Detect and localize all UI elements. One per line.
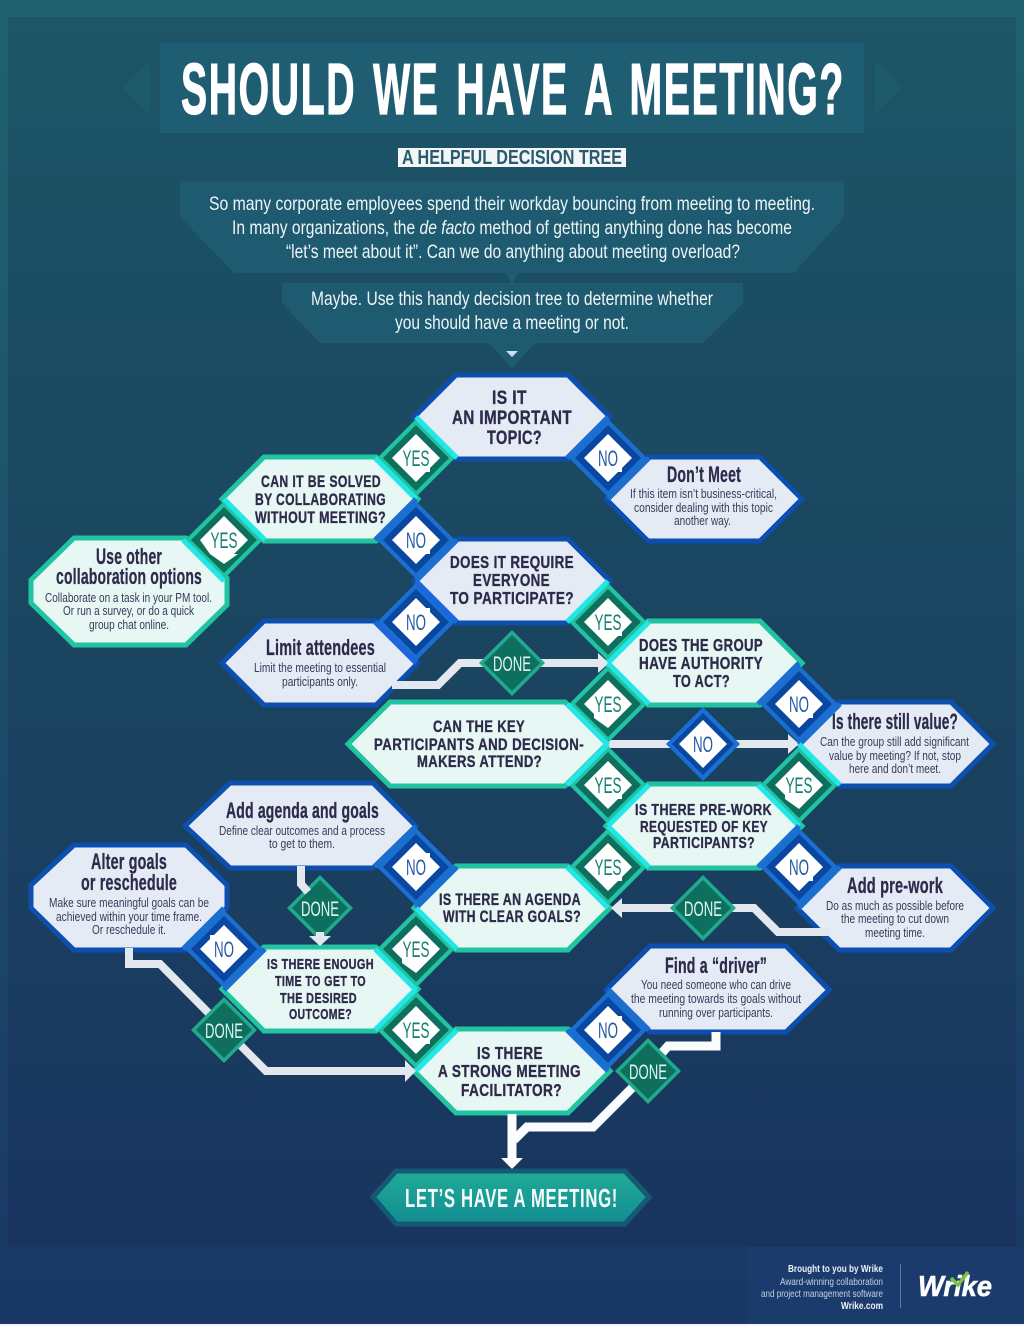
decision: no: NO: [406, 855, 426, 880]
outcome: alter goals or reschedule: [31, 845, 227, 950]
decision: yes: YES: [402, 937, 430, 962]
follow-up panel: [282, 283, 743, 368]
done: limit attendees: DONE: [493, 653, 531, 676]
decision: yes: YES: [594, 692, 622, 717]
outcome: alter goals or reschedule: achieved within your time frame.: [56, 910, 202, 924]
question: everyone participate: [414, 539, 610, 623]
decision: yes: YES: [210, 528, 238, 553]
arrow: facilitator to let's have a meeting: [501, 1114, 523, 1169]
outcome: use other collaboration options: collaboration options: [56, 564, 202, 589]
outcome: use other collaboration options: Use other: [96, 544, 162, 569]
outcome: find a driver: the meeting towards its goals without: [631, 992, 801, 1006]
decision: no: NO: [789, 692, 809, 717]
decision: yes: [567, 663, 649, 745]
follow-up panel: Maybe. Use this handy decision tree to determine whether: [311, 288, 713, 310]
decision: yes: YES: [594, 610, 622, 635]
arrow: alter goals to facilitator: [129, 948, 416, 1082]
arrow: limit attendees to authority: [392, 653, 609, 685]
outcome: add pre-work: Do as much as possible before: [826, 899, 964, 913]
decision: no: NO: [598, 446, 618, 471]
footer credit: and project management software: [761, 1288, 883, 1300]
decision: yes: [375, 908, 457, 990]
done: find a driver: [615, 1038, 681, 1104]
done: find a driver: DONE: [629, 1061, 667, 1084]
question: enough time: THE DESIRED: [280, 990, 357, 1007]
question: strong facilitator: FACILITATOR?: [461, 1080, 562, 1100]
outcome: use other collaboration options: Or run a survey, or do a quick: [63, 604, 195, 618]
question: enough time: IS THERE ENOUGH: [267, 956, 374, 973]
decision: no: [375, 581, 457, 663]
decision: yes: [183, 499, 265, 581]
decision: no: [567, 989, 649, 1071]
question: solved by collaborating: CAN IT BE SOLVED: [261, 472, 381, 491]
outcome: don't meet: Don’t Meet: [667, 462, 741, 487]
decision: no: [758, 826, 840, 908]
decision: yes: [375, 417, 457, 499]
outcome: add agenda and goals: Add agenda and goals: [226, 798, 379, 823]
question: strong facilitator: [414, 1029, 610, 1113]
footer credit: Award-winning collaboration: [780, 1276, 883, 1288]
done: add pre-work: DONE: [684, 898, 722, 921]
decision: no: NO: [598, 1018, 618, 1043]
question: key participants attend: MAKERS ATTEND?: [417, 752, 542, 771]
outcome: use other collaboration options: group chat online.: [89, 618, 169, 632]
question: pre-work: PARTICIPANTS?: [653, 835, 755, 852]
outcome: limit attendees: Limit attendees: [266, 635, 375, 660]
outcome: add pre-work: Add pre-work: [847, 873, 943, 898]
question: solved by collaborating: [222, 457, 418, 541]
footer credit: [747, 1247, 1024, 1324]
decision: no: NO: [693, 732, 713, 757]
outcome: limit attendees: Limit the meeting to essential: [254, 661, 386, 675]
decision: yes: YES: [594, 773, 622, 798]
done: alter goals: [191, 997, 257, 1063]
outcome: find a driver: Find a “driver”: [665, 953, 767, 978]
outcome: don't meet: If this item isn’t business-critical,: [630, 487, 777, 501]
logo: wrike: Wrike: [918, 1271, 992, 1303]
question: important topic: IS IT: [492, 388, 527, 409]
decision: yes: [567, 581, 649, 663]
outcome: alter goals or reschedule: Or reschedule it.: [92, 923, 166, 937]
decision: no: [375, 499, 457, 581]
question: everyone participate: TO PARTICIPATE?: [450, 588, 574, 608]
decision: yes: YES: [402, 1018, 430, 1043]
question: important topic: TOPIC?: [487, 428, 542, 449]
outcome: use other collaboration options: Collaborate on a task in your PM tool.: [45, 591, 212, 605]
outcome: limit attendees: [222, 621, 418, 705]
question: enough time: TIME TO GET TO: [275, 973, 366, 990]
question: strong facilitator: IS THERE: [477, 1043, 543, 1063]
question: pre-work: IS THERE PRE-WORK: [635, 802, 772, 819]
decision: no: NO: [406, 610, 426, 635]
outcome: don't meet: [606, 457, 802, 541]
outcome: add agenda and goals: [185, 783, 416, 868]
decision: yes: [567, 826, 649, 908]
question: pre-work: REQUESTED OF KEY: [640, 819, 768, 836]
done: add agenda: DONE: [301, 898, 339, 921]
outcome: add pre-work: [797, 866, 993, 950]
question: everyone participate: EVERYONE: [473, 570, 550, 590]
outcome: is there still value: here and don’t meet.: [849, 762, 941, 776]
decision: yes: YES: [786, 773, 812, 798]
outcome: is there still value: [797, 702, 993, 786]
question: enough time: OUTCOME?: [289, 1006, 352, 1023]
outcome: is there still value: value by meeting? If not, stop: [829, 749, 961, 763]
outcome: find a driver: You need someone who can drive: [641, 978, 791, 992]
decision: no: NO: [214, 937, 234, 962]
outcome: is there still value: Can the group still add significant: [820, 735, 969, 749]
intro panel: So many corporate employees spend their workday bouncing from meeting to meeting.: [209, 193, 815, 215]
question: enough time: [222, 947, 418, 1031]
decision: no: [183, 908, 265, 990]
question: important topic: AN IMPORTANT: [452, 408, 572, 429]
outcome: add agenda and goals: Define clear outcomes and a process: [219, 824, 385, 838]
question: key participants attend: CAN THE KEY: [433, 717, 525, 736]
outcome: alter goals or reschedule: Make sure meaningful goals can be: [49, 896, 209, 910]
outcome: add pre-work: the meeting to cut down: [841, 912, 949, 926]
decision: no: NO: [406, 528, 426, 553]
done: add agenda: [287, 875, 353, 941]
decision: yes: YES: [402, 446, 430, 471]
intro panel: In many organizations, the de facto method of getting anything done has become: [232, 217, 792, 239]
outcome: add pre-work: meeting time.: [865, 926, 925, 940]
done: add pre-work: [670, 875, 736, 941]
question: authority to act: DOES THE GROUP: [639, 635, 763, 655]
question: agenda with clear goals: WITH CLEAR GOALS?: [443, 908, 581, 926]
question: strong facilitator: A STRONG MEETING: [438, 1061, 581, 1081]
question: key participants attend: [348, 702, 607, 786]
footer credit: Brought to you by Wrike: [788, 1263, 883, 1275]
decision: yes: [567, 744, 649, 826]
done: alter goals: DONE: [205, 1020, 243, 1043]
question: authority to act: HAVE AUTHORITY: [639, 653, 763, 673]
outcome: add agenda and goals: to get to them.: [269, 837, 335, 851]
outcome: find a driver: [606, 946, 829, 1032]
decision: no: [666, 707, 740, 781]
decision: yes: YES: [594, 855, 622, 880]
decision: no: [567, 417, 649, 499]
decision: no: NO: [789, 855, 809, 880]
outcome: limit attendees: participants only.: [282, 675, 358, 689]
decision: yes: [375, 989, 457, 1071]
arrow: add agenda to enough time: [301, 866, 331, 946]
outcome: alter goals or reschedule: Alter goals: [91, 849, 167, 874]
question: agenda with clear goals: [414, 866, 610, 950]
final outcome: let's have a meeting: LET’S HAVE A MEETING!: [405, 1183, 618, 1213]
arrow: key participants to still value: [604, 734, 799, 754]
outcome: find a driver: running over participants.: [659, 1006, 773, 1020]
question: solved by collaborating: BY COLLABORATING: [255, 490, 386, 509]
question: everyone participate: DOES IT REQUIRE: [450, 552, 574, 572]
question: authority to act: [606, 621, 802, 705]
outcome: don't meet: consider dealing with this topic: [634, 501, 773, 515]
follow-up panel: you should have a meeting or not.: [395, 312, 629, 334]
question: important topic: [414, 375, 610, 459]
intro panel: [180, 181, 844, 285]
subtitle: A HELPFUL DECISION TREE: [402, 147, 622, 169]
decision: no: [758, 663, 840, 745]
question: pre-work: [606, 784, 802, 868]
question: agenda with clear goals: IS THERE AN AGENDA: [439, 891, 581, 909]
question: solved by collaborating: WITHOUT MEETING?: [255, 508, 386, 527]
question: authority to act: TO ACT?: [673, 671, 730, 691]
decision: no: [375, 826, 457, 908]
footer credit: Wrike.com: [841, 1300, 883, 1312]
intro panel: “let’s meet about it”. Can we do anything about meeting overload?: [286, 241, 740, 263]
question: key participants attend: PARTICIPANTS AND DECISION-: [374, 735, 584, 754]
outcome: don't meet: another way.: [674, 514, 731, 528]
outcome: alter goals or reschedule: or reschedule: [81, 870, 177, 895]
decision: yes: [758, 744, 840, 826]
done: limit attendees: [479, 630, 545, 696]
outcome: use other collaboration options: [31, 538, 227, 645]
arrow: add pre-work to agenda: [611, 898, 830, 932]
final outcome: let's have a meeting: [373, 1171, 649, 1224]
arrow: find a driver to meeting: [514, 1032, 716, 1140]
